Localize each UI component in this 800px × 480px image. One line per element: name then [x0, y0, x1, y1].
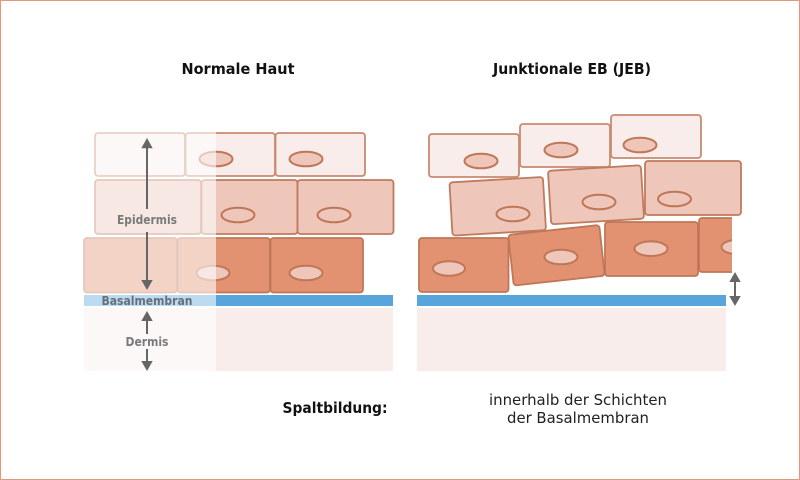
- label: Basalmembran: Basalmembran: [102, 293, 192, 308]
- text: cleavage location: [489, 391, 667, 427]
- bottom cell row: [419, 218, 759, 292]
- dermis: [84, 308, 393, 371]
- label: Spaltbildung: Spaltbildung:: [282, 399, 388, 417]
- label: Dermis: Dermis: [126, 334, 168, 349]
- arrow: split gap: [729, 272, 741, 306]
- label: Epidermis: Epidermis: [117, 212, 177, 227]
- bottom cell row: [84, 238, 363, 292]
- arrow: dermis extent: [141, 311, 153, 371]
- basement membrane: [417, 295, 726, 306]
- top cell row: [429, 115, 701, 177]
- heading: Normale Haut: Normale Haut: [182, 60, 295, 78]
- dermis: [417, 308, 726, 371]
- top cell row: [95, 133, 365, 176]
- text: cleavage location: der Basalmembran: [507, 409, 649, 427]
- panel: JEB skin diagram: [417, 115, 759, 371]
- basement membrane: [84, 295, 393, 306]
- middle cell row: [449, 161, 741, 236]
- panel: normal skin diagram: [83, 130, 394, 372]
- heading: Junktionale EB (JEB): Junktionale EB (JEB): [492, 60, 651, 78]
- text: cleavage location: innerhalb der Schichten: [489, 391, 667, 409]
- middle cell row: [95, 180, 394, 234]
- arrow: epidermis extent: [141, 138, 153, 290]
- translucent overlay: [83, 130, 216, 372]
